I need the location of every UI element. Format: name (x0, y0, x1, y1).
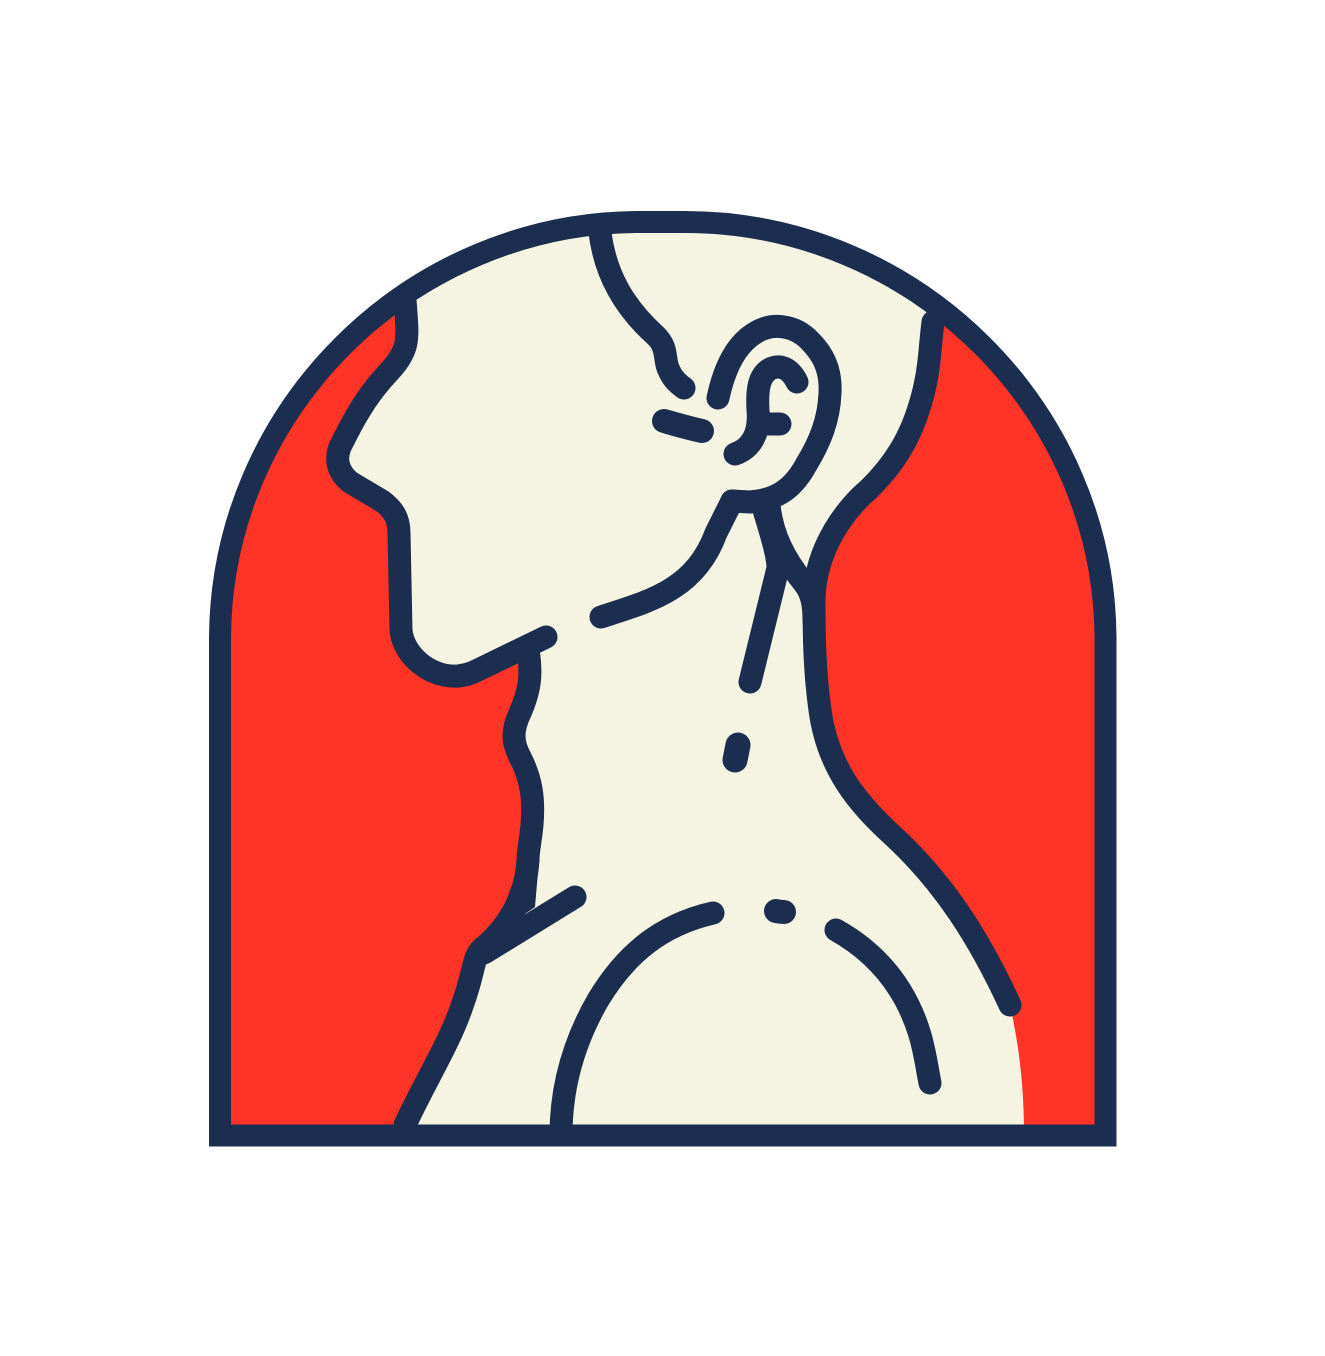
ear inner (735, 367, 797, 454)
head and body silhouette (337, 222, 1024, 1135)
throat and collar junction (495, 813, 543, 935)
neck dash (735, 745, 738, 760)
eye (664, 421, 702, 431)
neck muscle back (769, 505, 814, 620)
jaw (601, 501, 732, 617)
ear inner branch (764, 412, 780, 436)
back of head and neck (814, 322, 1010, 1005)
chest arc right (836, 930, 930, 1083)
navy outlines (220, 222, 1106, 1136)
chest dot (776, 911, 784, 912)
chest arc left (561, 913, 713, 1135)
arch background (220, 222, 1106, 1136)
sideburn (600, 232, 684, 388)
neck muscle front (750, 510, 778, 682)
arch outline (220, 222, 1106, 1136)
collarbone (484, 897, 575, 953)
throat (405, 650, 533, 1125)
ear outer (718, 326, 830, 502)
face profile (338, 300, 546, 676)
